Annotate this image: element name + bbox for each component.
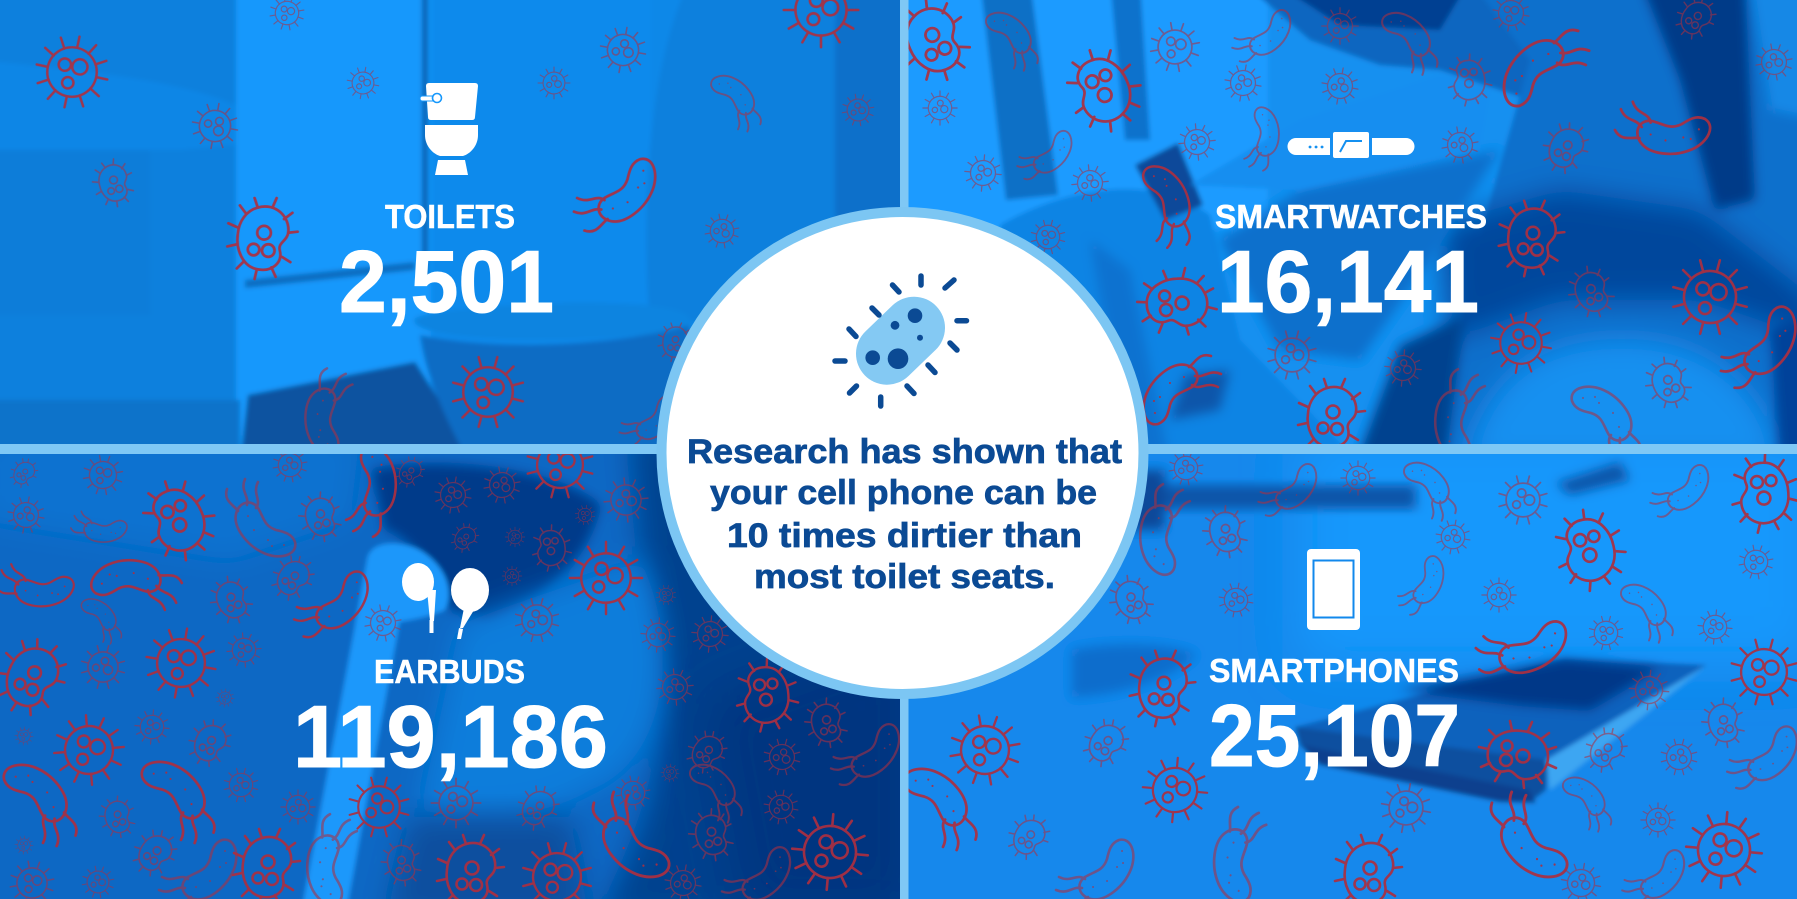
panel: smartphones — [888, 434, 1797, 899]
germs: smartwatches panel — [883, 0, 1797, 465]
callout text — [687, 433, 1122, 596]
divider: vertical bar — [900, 0, 908, 899]
number: toilets: 2,501 — [339, 232, 554, 331]
panel: toilets — [0, 0, 920, 464]
icon: bacterium — [835, 276, 966, 406]
photo: ear with earbud — [0, 434, 920, 899]
label: smartphones: SMARTPHONES — [1209, 652, 1459, 689]
callout text: Research has shown that — [687, 433, 1122, 471]
photo: bathroom with toilet — [0, 0, 920, 464]
number: earbuds: 119,186 — [293, 687, 608, 786]
divider: horizontal bar — [0, 444, 1797, 454]
circle background — [662, 212, 1144, 694]
callout text: 10 times dirtier than — [727, 517, 1082, 555]
number: smartphones: 25,107 — [1209, 686, 1460, 785]
germs: earbuds panel — [0, 424, 899, 899]
callout text: your cell phone can be — [710, 474, 1097, 512]
icon: smartwatch — [1288, 132, 1414, 158]
germs: smartphones panel — [904, 444, 1797, 899]
germs: toilets panel — [29, 0, 880, 460]
panel: earbuds — [0, 424, 920, 899]
callout text: most toilet seats. — [754, 558, 1055, 596]
icon: earbuds — [402, 563, 489, 639]
panel: smartwatches — [883, 0, 1797, 465]
icon: toilet — [420, 83, 478, 175]
callout: central circle — [662, 212, 1144, 694]
label: toilets: TOILETS — [385, 198, 515, 235]
number: smartwatches: 16,141 — [1217, 232, 1479, 331]
label: smartwatches: SMARTWATCHES — [1215, 198, 1487, 235]
icon: smartphone — [1307, 549, 1360, 630]
photo: smartphone on table — [1069, 454, 1797, 806]
photo: hand with smartwatch — [888, 0, 1797, 464]
label: earbuds: EARBUDS — [374, 653, 525, 690]
